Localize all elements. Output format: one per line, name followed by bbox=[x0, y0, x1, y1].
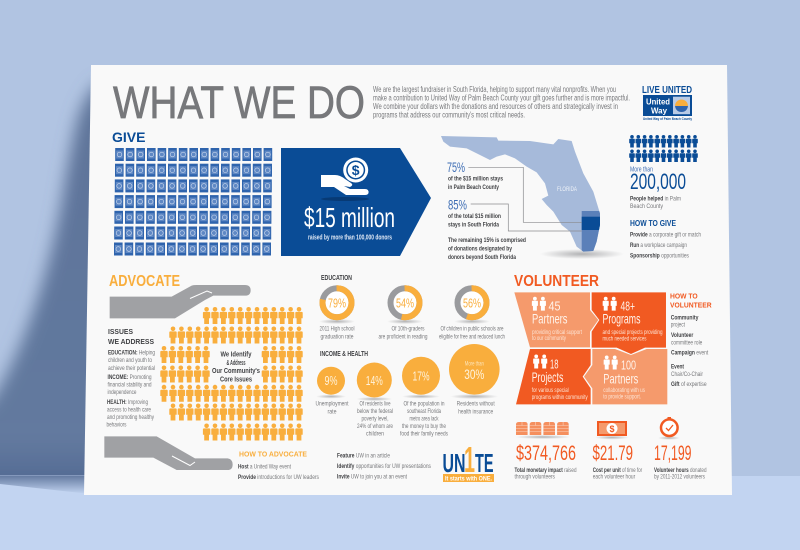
bubble: 9% bbox=[316, 367, 349, 416]
issues we address bbox=[106, 327, 155, 429]
how to advocate: additional items bbox=[337, 452, 431, 480]
donut: 79%: graduation rate bbox=[320, 334, 354, 340]
icon: lower hand bbox=[104, 436, 233, 470]
poster shadow on floor bbox=[0, 476, 90, 494]
callout: remaining 15%: The remaining 15% is comprised bbox=[448, 237, 526, 244]
how to advocate: additional items: Feature UW in an article bbox=[337, 452, 390, 460]
logo: Unite: 1 bbox=[464, 439, 475, 480]
bubble: 14%: below the federal bbox=[357, 408, 393, 415]
panel: 48+ programs bbox=[592, 292, 666, 354]
panel: 18 projects: programs within community bbox=[532, 395, 588, 401]
bubble: 30%: Residents without bbox=[457, 400, 495, 408]
how to advocate bbox=[238, 450, 319, 481]
panel: 48+ programs: Programs bbox=[602, 310, 640, 326]
donut: 54%: 54% bbox=[396, 296, 414, 310]
stat: cost per unit: $21.79 bbox=[592, 442, 633, 465]
how to give: HOW TO GIVE bbox=[630, 219, 677, 228]
arrow panel: $15 million bbox=[281, 148, 431, 256]
bubble: 30% bbox=[449, 344, 500, 416]
callout: 85%: 85% bbox=[448, 196, 467, 212]
panel: 100 partners: 100 bbox=[621, 358, 636, 372]
panel: 18 projects: for various special bbox=[532, 388, 569, 394]
issues we address: EDUCATION: Helping bbox=[108, 350, 155, 356]
donut: 54%: Of 10th-graders bbox=[392, 326, 425, 332]
callout: remaining 15%: donors beyond South Florida bbox=[448, 254, 516, 261]
how to advocate: HOW TO ADVOCATE bbox=[239, 450, 307, 458]
how to give: Provide a corporate gift or match bbox=[630, 232, 701, 238]
panel: 100 partners bbox=[584, 349, 667, 404]
stat: volunteer hours: 17,199 bbox=[654, 442, 692, 465]
logo: Live United bbox=[642, 85, 692, 121]
how to volunteer: Campaign event bbox=[671, 350, 708, 356]
icon: dollar bill: $ bbox=[609, 424, 615, 434]
bubble: 9%: Unemployment bbox=[316, 400, 349, 408]
people grid caption: Core Issues bbox=[220, 374, 252, 384]
title: WHAT WE DO bbox=[113, 77, 365, 128]
callout: 75%: 75% bbox=[447, 159, 465, 175]
logo: Unite bbox=[442, 439, 494, 482]
intro text bbox=[373, 84, 630, 120]
icon: hand holding coin bbox=[321, 158, 369, 201]
callout: 75%: of the $15 million stays bbox=[448, 176, 503, 182]
how to give: Sponsorship opportunities bbox=[630, 252, 689, 260]
how to volunteer: HOW TO bbox=[670, 292, 698, 300]
logo: Unite: It starts with ONE. bbox=[445, 476, 492, 482]
stat: 200,000 people helped: 200,000 bbox=[630, 169, 686, 194]
callout: 85% bbox=[448, 196, 501, 228]
heading: Income and Health: INCOME & HEALTH bbox=[320, 351, 368, 358]
poster shadow on wall bbox=[0, 79, 90, 476]
stat: total monetary impact: $374,766 bbox=[516, 442, 576, 465]
how to advocate: additional items: Identify opportunities for UW presentations bbox=[337, 463, 431, 470]
issues we address: ISSUES bbox=[108, 327, 133, 336]
how to volunteer: Volunteer bbox=[671, 332, 694, 339]
panel: 45 partners: 45 bbox=[548, 298, 560, 314]
bubble: 14%: poverty level, bbox=[362, 416, 389, 422]
panel: 100 partners: collaborating with us bbox=[603, 388, 645, 394]
panel: 45 partners: to our community bbox=[532, 336, 566, 342]
donut: 56%: eligible for free and reduced lunch bbox=[439, 334, 505, 340]
heading: Give: GIVE bbox=[112, 129, 145, 145]
poster sheet bbox=[84, 65, 732, 495]
how to volunteer: Gift of expertise bbox=[671, 381, 707, 388]
issues we address: achieve their potential bbox=[108, 365, 155, 372]
how to volunteer: project bbox=[671, 322, 685, 328]
bubble: 30%: health insurance bbox=[458, 408, 493, 416]
bubble: 30%: 30% bbox=[464, 366, 484, 382]
stat: volunteer hours: Volunteer hours donated bbox=[654, 467, 707, 474]
logo: Live United: United bbox=[646, 98, 670, 106]
map: Florida bbox=[441, 136, 624, 259]
icon: money stacks bbox=[516, 422, 569, 435]
issues we address: and promoting healthy bbox=[107, 414, 154, 421]
heading: Volunteer: VOLUNTEER bbox=[514, 273, 599, 290]
donut: 79%: 79% bbox=[328, 296, 346, 310]
how to give bbox=[630, 219, 701, 260]
intro text: programs that address our community's most critical needs. bbox=[373, 110, 525, 120]
bubble: 14%: Of residents live bbox=[360, 400, 391, 408]
bubble: 9%: 9% bbox=[324, 374, 338, 388]
bubble: 30%: More than bbox=[465, 362, 484, 368]
donut: 56%: Of children in public schools are bbox=[440, 326, 504, 332]
panel: 18 projects: Projects bbox=[532, 369, 563, 385]
panel: 48+ programs: and special projects providing bbox=[602, 330, 662, 336]
bubble: 17%: southeast Florida bbox=[407, 408, 441, 415]
callout: 85%: of the total $15 million bbox=[448, 213, 501, 220]
issues we address: behaviors bbox=[106, 422, 127, 429]
stat: 200,000 people helped: Beach County bbox=[630, 203, 663, 210]
panel: 100 partners: Partners bbox=[603, 370, 638, 386]
how to advocate: Host a United Way event bbox=[238, 464, 291, 470]
how to volunteer: Community bbox=[671, 314, 699, 322]
panel: 45 partners: providing critical support bbox=[532, 330, 582, 336]
issues we address: INCOME: Promoting bbox=[108, 374, 152, 381]
stat: 200,000 people helped: People helped in Palm bbox=[630, 196, 681, 202]
intro text: We are the largest fundraiser in South Florida, helping to support many vital nonprofits. When you bbox=[373, 84, 616, 94]
icon: clock bbox=[661, 417, 678, 436]
people helped icons bbox=[629, 135, 698, 162]
callout: 85%: stays in South Florida bbox=[448, 222, 499, 228]
issues we address: HEALTH: Improving bbox=[107, 399, 148, 406]
bubble: 14%: 14% bbox=[366, 373, 383, 388]
panel: 100 partners: to provide support. bbox=[603, 394, 641, 400]
how to give: Run a workplace campaign bbox=[630, 242, 687, 249]
panel: 45 partners: Partners bbox=[532, 310, 568, 326]
donut: 54% bbox=[378, 288, 428, 340]
stat: total monetary impact: Total monetary impact raised bbox=[514, 467, 577, 474]
donut: 79%: 2011 High school bbox=[320, 326, 355, 332]
stat: 200,000 people helped: More than bbox=[630, 166, 653, 174]
people grid caption: & Address bbox=[226, 358, 246, 367]
heading: Advocate: ADVOCATE bbox=[109, 273, 180, 290]
logo: Live United: United Way of Palm Beach County bbox=[643, 117, 692, 121]
logo: Live United: LIVE UNITED bbox=[642, 85, 692, 96]
issues we address: independence bbox=[108, 389, 137, 396]
panel: 45 partners bbox=[514, 292, 598, 347]
stat: cost per unit bbox=[592, 421, 643, 480]
map: Florida: FLORIDA bbox=[557, 186, 577, 193]
bill grid bbox=[114, 148, 272, 256]
how to volunteer: Event bbox=[671, 364, 685, 370]
people grid caption: Our Community's bbox=[212, 366, 260, 375]
how to volunteer: VOLUNTEER bbox=[670, 300, 712, 310]
issues we address: financial stability and bbox=[108, 382, 152, 388]
bubble: 14%: 24% of whom are bbox=[357, 423, 393, 430]
callout: 75% bbox=[447, 159, 503, 191]
bubble: 14%: children bbox=[366, 430, 384, 438]
stat: cost per unit: each volunteer hour bbox=[593, 474, 636, 480]
leader lines bbox=[468, 167, 582, 231]
issues we address: access to health care bbox=[107, 407, 151, 414]
donut: 56% bbox=[439, 288, 505, 340]
issues we address: WE ADDRESS bbox=[108, 337, 154, 346]
panel: 48+ programs: much needed services bbox=[602, 336, 646, 342]
callout: remaining 15%: of donations designated by bbox=[448, 246, 512, 252]
stat: total monetary impact bbox=[514, 422, 577, 480]
people grid bbox=[160, 307, 303, 440]
donut: 56%: 56% bbox=[463, 296, 481, 310]
logo: Unite: TE bbox=[475, 448, 494, 478]
icon: hand holding coin: $ bbox=[352, 162, 360, 178]
people grid caption bbox=[212, 350, 260, 384]
how to volunteer bbox=[670, 292, 712, 388]
callout: remaining 15% bbox=[448, 237, 526, 261]
bubble: 9%: rate bbox=[328, 408, 337, 416]
intro text: We combine your dollars with the donations and resources of others and strategically invest in bbox=[373, 101, 618, 111]
bubble: 17%: food their family needs bbox=[400, 430, 448, 438]
donut: 79% bbox=[319, 288, 355, 340]
icon: upper hand bbox=[110, 285, 251, 318]
callout: 75%: in Palm Beach County bbox=[448, 184, 499, 191]
bubble: 14% bbox=[356, 362, 393, 438]
stat: volunteer hours bbox=[654, 417, 707, 480]
arrow panel: $15 million: $15 million bbox=[304, 202, 395, 233]
logo: Unite: UN bbox=[442, 448, 466, 478]
stat: 200,000 people helped bbox=[630, 166, 686, 210]
panel: 18 projects bbox=[516, 349, 591, 404]
how to volunteer: committee role bbox=[671, 340, 702, 346]
stat: cost per unit: Cost per unit of time for bbox=[593, 467, 643, 474]
bubble: 17%: the money to buy the bbox=[402, 423, 446, 430]
panel: 48+ programs: 48+ bbox=[620, 298, 635, 314]
stat: total monetary impact: through volunteers bbox=[514, 474, 555, 480]
bubble: 17%: metro area lack bbox=[410, 416, 439, 422]
stat: volunteer hours: by 2011-2012 volunteers bbox=[654, 474, 705, 480]
bubble: 17%: 17% bbox=[412, 368, 430, 384]
panel: 18 projects: 18 bbox=[550, 356, 558, 372]
bubble: 17% bbox=[400, 357, 448, 438]
intro text: make a contribution to United Way of Palm Beach County your gift goes further and is more impactful. bbox=[373, 93, 630, 103]
bubble: 17%: Of the population in bbox=[404, 400, 445, 408]
heading: Education: EDUCATION bbox=[321, 275, 352, 282]
donut: 54%: are proficient in reading bbox=[378, 334, 428, 340]
how to volunteer: Chair/Co-Chair bbox=[671, 371, 704, 378]
how to advocate: Provide introductions for UW leaders bbox=[238, 474, 319, 481]
logo: Live United: Way bbox=[651, 106, 668, 116]
people grid caption: We Identify bbox=[220, 350, 252, 358]
how to advocate: additional items: Invite UW to join you at an event bbox=[337, 474, 407, 480]
arrow panel: $15 million: raised by more than 100,000 donors bbox=[308, 234, 392, 242]
floor background bbox=[0, 476, 800, 550]
issues we address: children and youth to bbox=[108, 357, 152, 364]
